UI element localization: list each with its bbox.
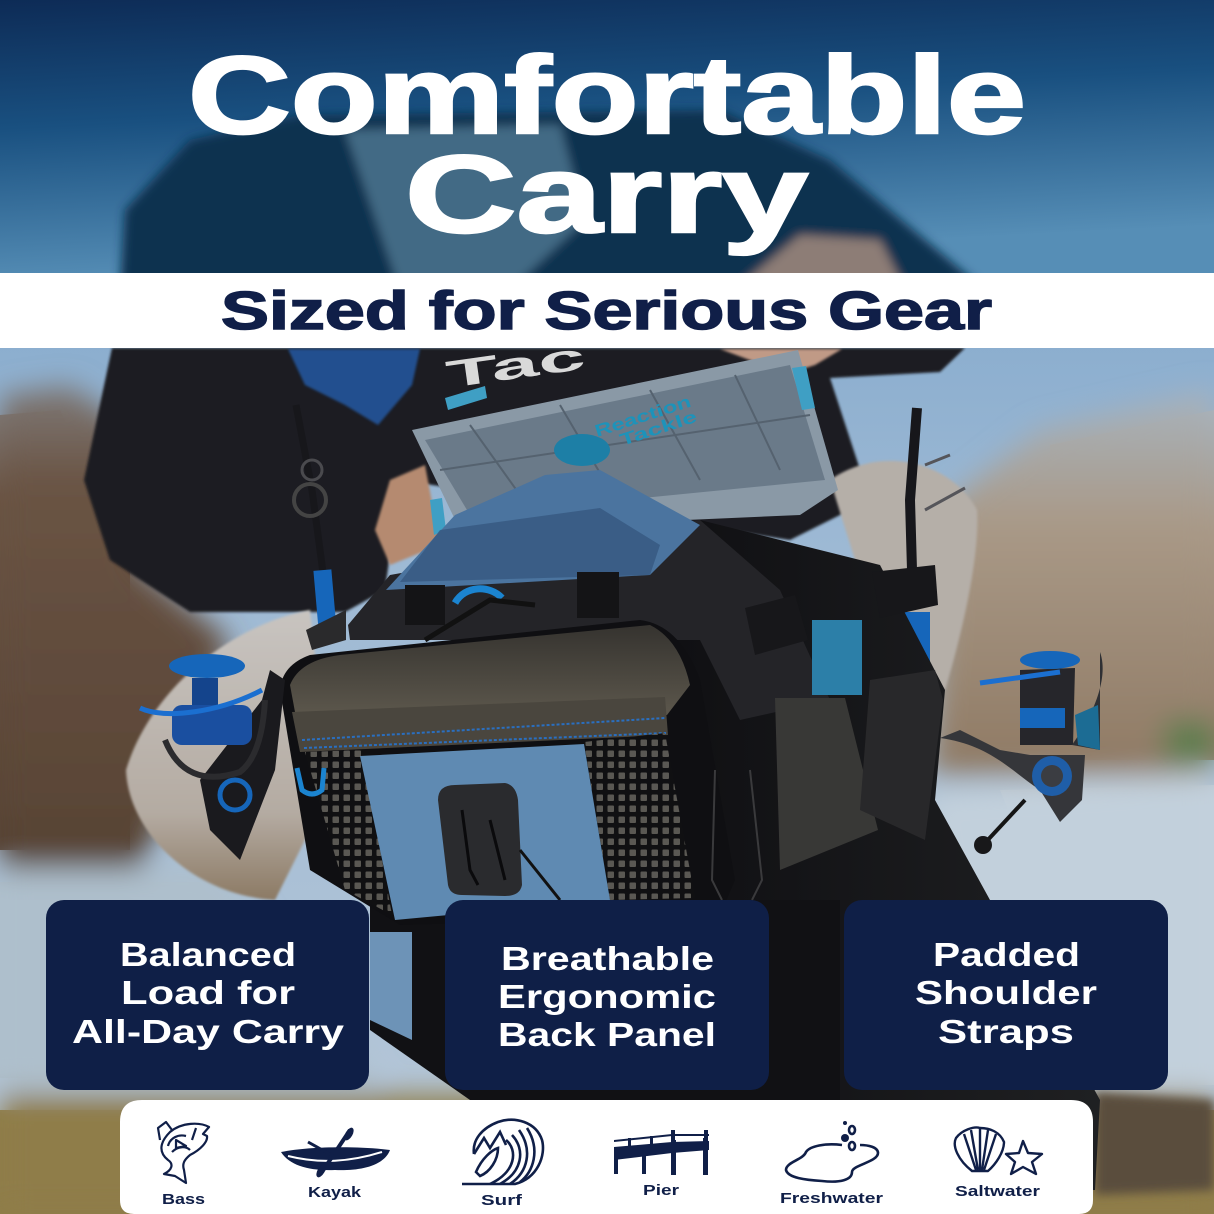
ground rocks — [1095, 1092, 1214, 1195]
title — [188, 34, 1026, 256]
label: bass: Bass — [162, 1192, 205, 1208]
side wing panel — [775, 698, 878, 870]
person: hands — [375, 349, 842, 565]
subtitle band — [0, 273, 1214, 348]
sweatshirt logo — [288, 336, 588, 425]
webbing and zipper pulls — [405, 565, 938, 695]
bag upper compartment — [348, 520, 830, 720]
fishing rod right — [902, 408, 965, 672]
card: breathable back panel: Back Panel — [498, 1016, 716, 1053]
mesh left — [305, 750, 392, 915]
top header area — [0, 0, 1214, 290]
card: balanced load: Balanced — [120, 936, 296, 973]
label: surf: Surf — [481, 1193, 522, 1209]
icon: kayak — [281, 1126, 390, 1179]
card: balanced load: Load for — [121, 974, 295, 1011]
blurred figure behind title — [120, 110, 985, 290]
main front pocket — [280, 620, 735, 925]
label: saltwater: Saltwater — [955, 1184, 1040, 1200]
blue centre panel — [360, 744, 610, 920]
icon: shell and star — [955, 1127, 1042, 1174]
icon bar — [120, 1100, 1093, 1214]
mesh right — [584, 733, 695, 900]
treeline and lake base — [0, 410, 1214, 1214]
card: breathable back panel: Ergonomic — [498, 978, 716, 1015]
side strap panel — [860, 670, 943, 840]
fishing rod left — [294, 405, 346, 650]
card: breathable back panel: Breathable — [501, 940, 714, 977]
card: padded straps: Shoulder — [915, 974, 1097, 1011]
icon: surf wave — [462, 1120, 543, 1184]
box branding — [554, 392, 699, 466]
card: balanced load — [46, 900, 369, 1090]
front patch — [438, 783, 522, 896]
card: padded straps: Straps — [938, 1013, 1074, 1050]
label: kayak: Kayak — [308, 1185, 362, 1201]
icon: bass — [158, 1122, 209, 1183]
card: breathable back panel — [445, 900, 769, 1090]
card: padded straps — [844, 900, 1168, 1090]
zipper loop — [297, 768, 324, 794]
fishing reel left — [140, 654, 285, 860]
sweatshirt logo: Tac — [443, 336, 588, 397]
bag body — [280, 470, 1100, 1190]
bag rear body — [650, 520, 1100, 1190]
person: sweatshirt — [84, 348, 965, 612]
lower blue panel — [370, 932, 412, 1040]
label: pier: Pier — [643, 1183, 679, 1199]
tackle box — [412, 350, 838, 535]
box branding: Tackle — [617, 407, 699, 450]
title: Comfortable — [188, 34, 1026, 157]
subtitle band: Sized for Serious Gear — [221, 281, 992, 341]
blurred treeline and lake — [0, 385, 1214, 1214]
fishing reel right — [940, 651, 1103, 854]
bag lower section — [370, 900, 840, 1100]
person: pants — [126, 461, 977, 900]
icon: freshwater puddle — [786, 1121, 878, 1182]
icon: pier — [614, 1130, 709, 1175]
title: Carry — [405, 133, 808, 256]
bag blue flap — [386, 470, 700, 590]
box branding: Reaction — [592, 392, 693, 441]
card: balanced load: All-Day Carry — [72, 1013, 345, 1050]
card: padded straps: Padded — [933, 936, 1080, 973]
label: freshwater: Freshwater — [780, 1191, 883, 1207]
